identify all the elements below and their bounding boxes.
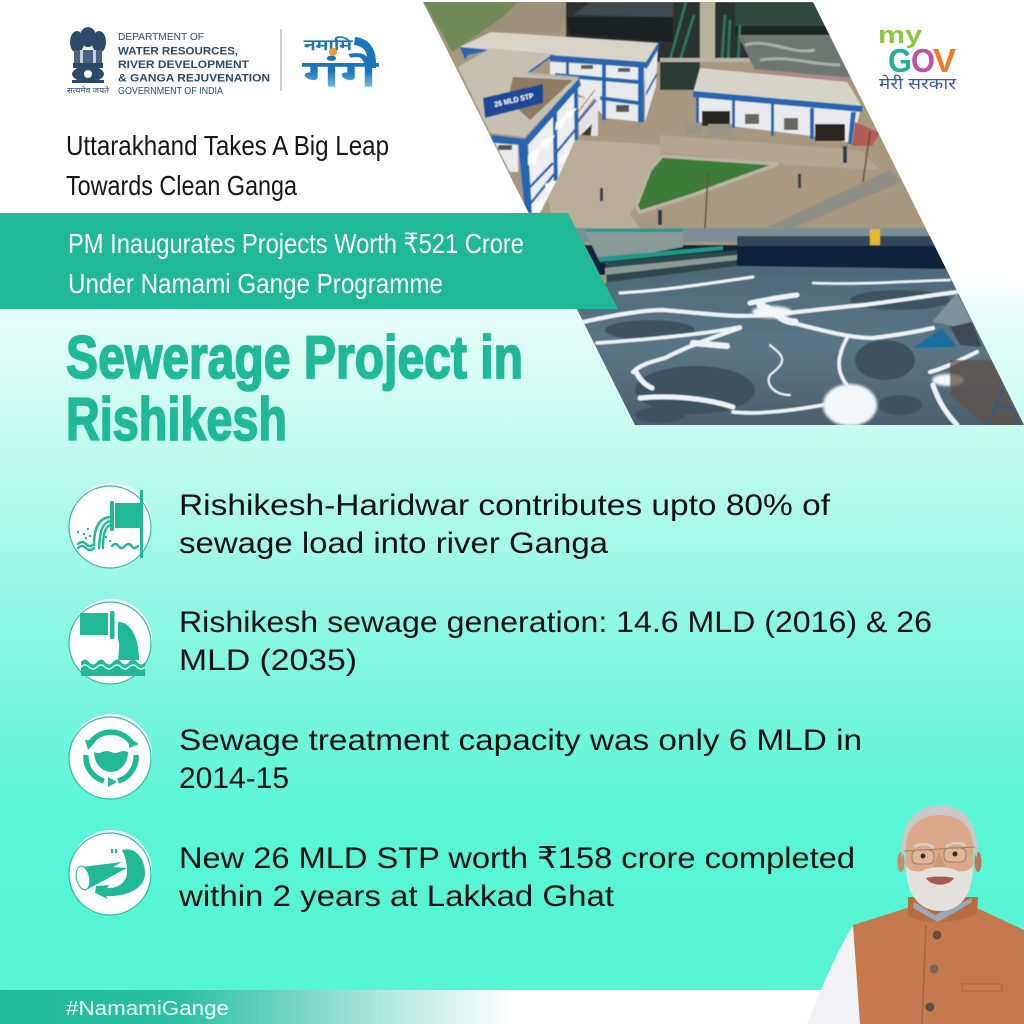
MyGov logo: G xyxy=(888,42,912,79)
MyGov logo: my xyxy=(878,22,923,49)
text: new STP: within 2 years at Lakkad Ghat xyxy=(178,880,615,913)
text: sewage generation: MLD (2035) xyxy=(179,644,357,677)
text: treatment capacity xyxy=(179,724,862,795)
top field and road xyxy=(423,2,518,52)
front building tower xyxy=(458,48,579,137)
MyGov logo: मेरी सरकार xyxy=(879,74,957,93)
text: sewage generation: Rishikesh sewage generation: 14.6 MLD (2016) & 26 xyxy=(179,606,932,639)
footer hashtag bar xyxy=(0,990,1024,1024)
aeration water xyxy=(570,266,1024,430)
department text xyxy=(118,32,270,97)
Namami Gange logo: नमामि xyxy=(303,36,353,54)
text: sewage load: Rishikesh-Haridwar contributes upto 80% of xyxy=(179,489,831,522)
department text: WATER RESOURCES, xyxy=(118,46,238,58)
icon: new STP pipe xyxy=(69,830,152,915)
sign board xyxy=(483,84,543,118)
text: new STP: New 26 MLD STP worth ₹158 crore completed xyxy=(179,842,855,875)
text: treatment capacity: 2014-15 xyxy=(179,762,289,795)
department text: & GANGA REJUVENATION xyxy=(118,72,270,84)
subtitle heading xyxy=(66,130,389,201)
photo: sewage treatment plant: 26 MLD STP xyxy=(493,91,534,109)
text: new STP xyxy=(178,842,855,913)
MyGov logo: V xyxy=(933,42,956,79)
portrait of the Prime Minister xyxy=(807,805,1024,1024)
subtitle heading: Towards Clean Ganga xyxy=(66,170,297,201)
department text: DEPARTMENT OF xyxy=(118,32,204,43)
icon: sewage outfall xyxy=(69,483,152,568)
ground path and lawn xyxy=(540,134,598,213)
main title xyxy=(66,324,523,453)
header logos xyxy=(67,27,380,97)
green banner xyxy=(0,213,618,309)
footer hashtag bar: #NamamiGange xyxy=(66,998,229,1020)
back building xyxy=(460,32,658,64)
icon: outfall pipe xyxy=(69,599,152,684)
right building xyxy=(693,68,863,108)
photo: sewage treatment plant xyxy=(420,0,1024,430)
main title: Rishikesh xyxy=(66,386,287,453)
dark pools xyxy=(566,2,826,62)
emblem of India: सत्यमेव जयते xyxy=(67,85,109,95)
text: sewage load xyxy=(179,489,831,560)
department text: GOVERNMENT OF INDIA xyxy=(118,86,223,97)
Namami Gange logo: गंगे xyxy=(301,53,380,94)
Namami Gange logo xyxy=(301,36,380,94)
main title: Sewerage Project in xyxy=(66,324,523,391)
green banner: Under Namami Gange Programme xyxy=(68,268,443,299)
aerator machine xyxy=(950,360,1024,425)
text: sewage load: sewage load into river Ganga xyxy=(179,527,608,560)
MyGov logo xyxy=(878,22,957,93)
MyGov logo: O xyxy=(911,42,935,79)
subtitle heading: Uttarakhand Takes A Big Leap xyxy=(66,130,389,161)
emblem of India xyxy=(67,27,109,95)
text: sewage generation xyxy=(179,606,932,677)
text: treatment capacity: Sewage treatment capacity was only 6 MLD in xyxy=(179,724,862,757)
icon: treatment cycle xyxy=(69,714,152,799)
green banner: PM Inaugurates Projects Worth ₹521 Crore xyxy=(68,228,524,259)
aeration structures xyxy=(576,228,930,242)
department text: RIVER DEVELOPMENT xyxy=(118,59,249,71)
